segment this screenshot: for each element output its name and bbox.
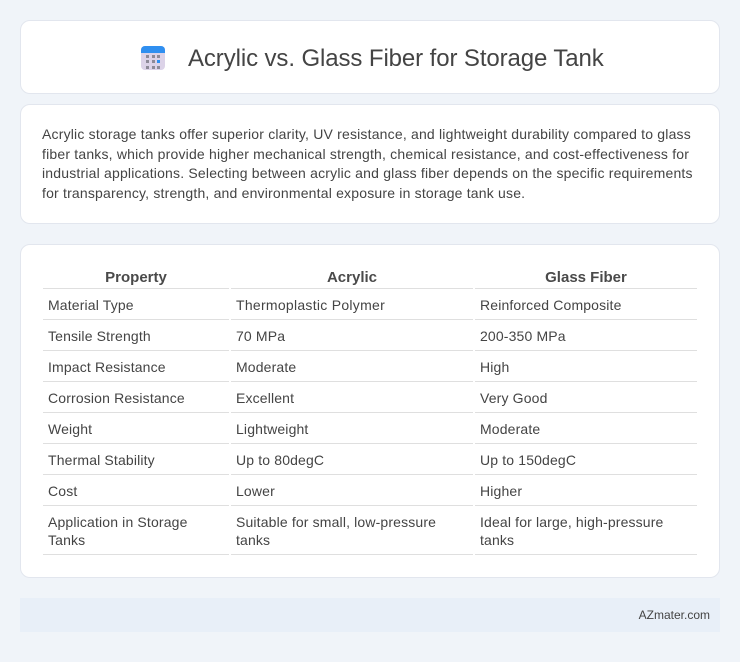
row: impact resistance: Moderate [236,359,296,375]
row: application in storage tanks: Ideal for large, high-pressure [480,514,664,530]
row: thermal stability [48,452,576,468]
row: weight: Lightweight [236,421,308,437]
row: application in storage tanks: tanks [480,532,514,548]
row: application in storage tanks: Application in Storage [48,514,188,530]
footer brand: AZmater.com [639,608,710,622]
header panel [20,20,720,94]
row: tensile strength: Tensile Strength [48,328,151,344]
table: property comparison [43,269,697,555]
column headers: Glass Fiber [545,269,627,286]
row: material type: Reinforced Composite [480,297,622,313]
intro paragraph: Acrylic storage tanks offer superior clarity, UV resistance, and lightweight durability compared to glass [42,126,691,142]
row: material type: Material Type [48,297,134,313]
row: corrosion resistance: Corrosion Resistance [48,390,185,406]
comparison table panel [20,244,720,578]
icon: calendar [141,46,165,70]
row: application in storage tanks: Suitable for small, low-pressure [236,514,436,530]
row: thermal stability: Thermal Stability [48,452,155,468]
footer bar [20,598,720,632]
row: impact resistance [48,359,509,375]
column headers: Acrylic [327,269,377,286]
column headers [105,269,627,286]
row: corrosion resistance: Very Good [480,390,548,406]
intro paragraph: for transparency, strength, and environmental exposure in storage tank use. [42,184,525,200]
row: weight [48,421,540,437]
row: corrosion resistance [48,390,548,406]
row: application in storage tanks: Tanks [48,532,85,548]
row: weight: Moderate [480,421,540,437]
row: cost: Higher [480,483,522,499]
row: tensile strength: 70 MPa [236,328,285,344]
row: cost [48,483,522,499]
row: impact resistance: High [480,359,509,375]
intro paragraph: fiber tanks, which provide higher mechanical strength, chemical resistance, and cost-effectiveness for [42,146,689,162]
row: thermal stability: Up to 150degC [480,452,576,468]
row: application in storage tanks [48,514,664,548]
row: corrosion resistance: Excellent [236,390,294,406]
title: Acrylic vs. Glass Fiber for Storage Tank [188,45,604,72]
row: application in storage tanks: tanks [236,532,270,548]
row: material type [48,297,622,313]
intro text panel [20,104,720,224]
row: material type: Thermoplastic Polymer [236,297,385,313]
row: tensile strength [48,328,566,344]
intro paragraph [42,126,693,201]
row: cost: Lower [236,483,275,499]
row: impact resistance: Impact Resistance [48,359,166,375]
intro paragraph: industrial applications. Selecting between acrylic and glass fiber depends on the specific requirements [42,165,693,181]
row: weight: Weight [48,421,92,437]
row: tensile strength: 200-350 MPa [480,328,566,344]
row: cost: Cost [48,483,77,499]
column headers: Property [105,269,167,286]
row: thermal stability: Up to 80degC [236,452,324,468]
